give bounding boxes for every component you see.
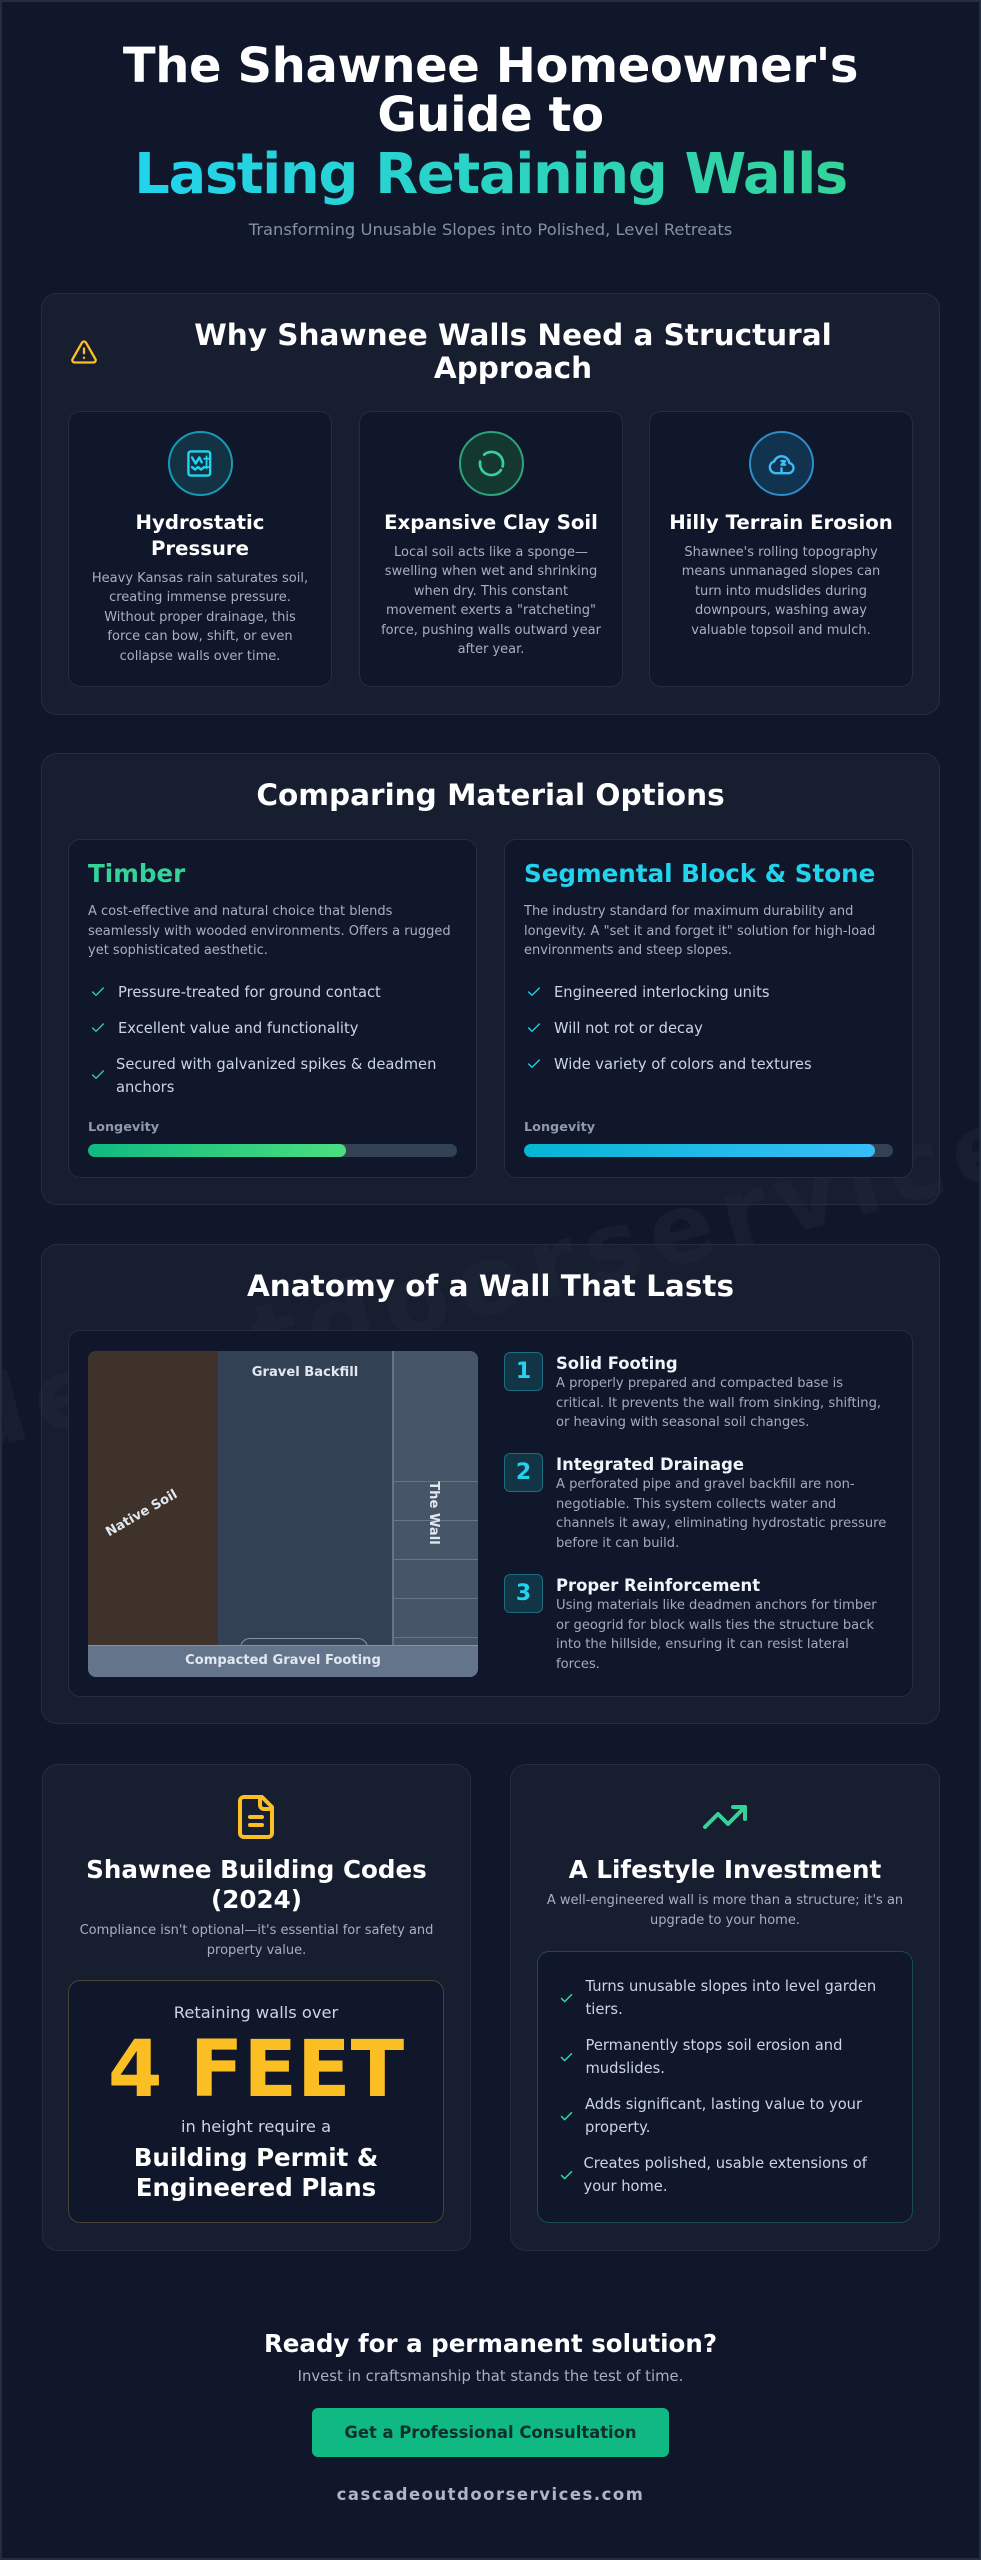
step title: Solid Footing [556,1354,678,1373]
step text: into the hillside, ensuring it can resist lateral [556,1637,849,1652]
icon: check [92,987,104,996]
card text: Local soil acts like a sponge— [394,544,588,560]
heading [194,318,832,385]
card text: after year. [458,642,524,657]
button [312,2408,669,2457]
benefit: property. [585,2119,650,2136]
heading: Comparing Material Options [256,778,725,812]
panel: Shawnee building codes [42,1764,471,2251]
panel: a lifestyle investment [510,1764,940,2251]
step text: before it can build. [556,1536,679,1551]
check list [528,984,812,1073]
step title: Integrated Drainage [556,1455,744,1474]
big number: 4 FEET [108,2023,404,2115]
card title: Hydrostatic [136,511,264,534]
badge [504,1453,543,1492]
icon: warning triangle [71,340,97,364]
label: the wall: The Wall [426,1481,441,1545]
card text: Shawnee's rolling topography [684,544,878,560]
title: Guide to [377,87,604,143]
badge: 3 [516,1581,531,1606]
label: Longevity [524,1120,595,1135]
card: hilly terrain erosion [649,411,913,687]
step text: negotiable. This system collects water and [556,1497,836,1512]
benefit [584,2155,868,2195]
benefit [585,1978,876,2018]
card text [682,544,880,638]
card: timber [68,839,477,1178]
subtext [547,1893,903,1928]
panel: anatomy of a wall that lasts [41,1244,940,1724]
card title [136,511,264,560]
callout requirement [134,2143,378,2202]
card text: downpours, washing away [695,603,867,618]
callout lead: Retaining walls over [174,2003,338,2022]
card text [88,904,451,958]
card text: force, pushing walls outward year [381,623,601,638]
card text: force can bow, shift, or even [107,629,293,644]
icon: check [560,2170,572,2180]
card text [381,544,601,657]
card text [524,904,875,958]
list item: Excellent value and functionality [118,1020,358,1037]
benefit [586,2037,842,2077]
card text: yet sophisticated aesthetic. [88,943,268,958]
benefit: your home. [584,2178,668,2195]
call to action [264,2329,717,2504]
icon: cloud rain [749,431,814,496]
subtitle: Transforming Unusable Slopes into Polished, Level Retreats [249,220,732,238]
header [123,38,858,238]
card text: creating immense pressure. [109,590,291,605]
card title: Timber [88,859,185,888]
icon: check [528,1059,540,1068]
check list [92,984,436,1096]
card text: longevity. A "set it and forget it" solution for high-load [524,924,875,939]
label: native soil: Native Soil [103,1487,180,1540]
benefit [585,2096,862,2136]
step 3 [504,1574,877,1672]
title [123,38,858,143]
list item: anchors [116,1079,174,1096]
list item: Secured with galvanized spikes & deadmen [116,1056,436,1073]
longevity bar [524,1144,893,1157]
step text: or heaving with seasonal soil changes. [556,1415,809,1430]
subtext: A well-engineered wall is more than a structure; it's an [547,1893,903,1908]
benefit: Turns unusable slopes into level garden [586,1978,876,1995]
badge [504,1352,543,1391]
step text: forces. [556,1657,600,1672]
heading: (2024) [211,1885,302,1914]
step text [556,1477,886,1551]
card text: valuable topsoil and mulch. [691,623,871,638]
card text [92,570,308,664]
card text: when dry. This constant [414,584,568,599]
step text: A properly prepared and compacted base is [556,1376,843,1391]
website: cascadeoutdoorservices.com [337,2485,644,2504]
card title: Segmental Block & Stone [524,859,875,888]
subtext: upgrade to your home. [650,1913,800,1928]
card text: A cost-effective and natural choice that blends [88,904,392,919]
heading [86,1855,427,1914]
card text: Without proper drainage, this [104,610,296,625]
callout requirement: Engineered Plans [136,2173,376,2202]
step 1 [504,1352,881,1430]
card title: Pressure [151,537,249,560]
diagram: wall cross-section [88,1351,478,1677]
icon: cycle arrows [459,431,524,496]
card: anatomy content [68,1330,913,1697]
badge [504,1574,543,1613]
step text: critical. It prevents the wall from sinking, shifting, [556,1396,881,1411]
heading: Why Shawnee Walls Need a Structural [194,318,832,352]
icon: check [560,1994,572,2002]
label: gravel backfill: Gravel Backfill [252,1365,358,1380]
card: expansive clay soil [359,411,623,687]
card text: turn into mudslides during [695,584,867,599]
card: segmental block and stone [504,839,913,1178]
panel: comparing material options [41,753,940,1205]
callout middle: in height require a [181,2117,331,2136]
card: hydrostatic pressure [68,411,332,687]
card text: swelling when wet and shrinking [385,564,597,579]
card title: Hilly Terrain Erosion [669,511,893,534]
badge: 2 [516,1460,531,1485]
heading: Anatomy of a Wall That Lasts [247,1269,734,1303]
step text [556,1376,881,1430]
callout: 4 feet rule [68,1980,444,2223]
subtext: Compliance isn't optional—it's essential for safety and [80,1923,433,1938]
step title: Proper Reinforcement [556,1576,760,1595]
step text: Using materials like deadmen anchors for timber [556,1598,877,1613]
button: Get a Professional Consultation [344,2423,637,2442]
benefit: mudslides. [586,2060,665,2077]
panel: why Shawnee walls need a structural approach [41,293,940,715]
benefit: Creates polished, usable extensions of [584,2155,867,2172]
list item: Will not rot or decay [554,1020,703,1037]
list item: Wide variety of colors and textures [554,1056,812,1073]
wall blocks [392,1351,478,1645]
step text: channels it away, eliminating hydrostatic pressure [556,1516,886,1531]
card text: movement exerts a "ratcheting" [386,603,596,618]
icon: trending up [702,1804,748,1830]
list item: Pressure-treated for ground contact [118,984,381,1001]
gravel backfill layer [218,1351,392,1645]
icon: hydrostatic pressure [168,431,233,496]
step text [556,1598,877,1672]
compacted gravel footing [88,1645,478,1677]
benefits list [537,1951,913,2223]
benefit: Permanently stops soil erosion and [586,2037,842,2054]
title highlight: Lasting Retaining Walls [134,142,847,207]
card title: Expansive Clay Soil [384,511,598,534]
heading: A Lifestyle Investment [569,1855,881,1884]
longevity bar [88,1144,457,1157]
callout requirement: Building Permit & [134,2143,378,2172]
benefit: tiers. [586,2001,623,2018]
badge: 1 [516,1359,531,1384]
card text: means unmanaged slopes can [682,564,880,579]
label: Longevity [88,1120,159,1135]
icon: check [528,987,540,996]
step text: A perforated pipe and gravel backfill are non- [556,1477,855,1492]
list item [116,1056,436,1096]
label: compacted gravel footing: Compacted Gravel Footing [185,1653,381,1668]
heading: Shawnee Building Codes [86,1855,427,1884]
card text: collapse walls over time. [120,649,280,664]
step text: or geogrid for block walls ties the structure back [556,1618,874,1633]
icon: check [528,1023,540,1032]
card text: environments and steep slopes. [524,943,732,958]
card text: Heavy Kansas rain saturates soil, [92,570,308,586]
subtext: property value. [207,1943,306,1958]
heading: Approach [434,351,592,385]
native soil layer [88,1351,218,1645]
card text: The industry standard for maximum durability and [524,904,853,919]
icon: document [238,1795,274,1839]
icon: check [560,2052,572,2062]
icon: check [92,1070,104,1079]
step 2 [504,1453,886,1551]
heading: Ready for a permanent solution? [264,2329,717,2358]
list item: Engineered interlocking units [554,984,769,1001]
icon: check [92,1023,104,1032]
card text: seamlessly with wooded environments. Offers a rugged [88,924,451,939]
drain pipe [240,1638,368,1650]
subtext: Invest in craftsmanship that stands the test of time. [298,2368,683,2385]
icon: check [560,2112,572,2120]
benefit: Adds significant, lasting value to your [585,2096,862,2113]
subtext [80,1923,433,1958]
title: The Shawnee Homeowner's [123,38,858,94]
